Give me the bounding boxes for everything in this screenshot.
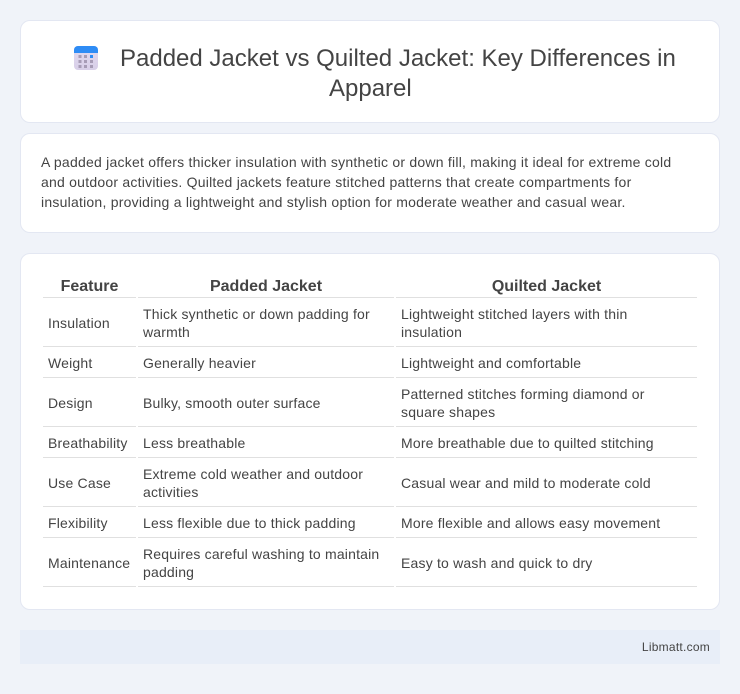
table: feature comparison: Patterned stitches forming diamond or xyxy=(401,386,645,402)
table: feature comparison: padding xyxy=(143,564,194,580)
table: feature comparison: Insulation xyxy=(48,315,110,331)
table: feature comparison: warmth xyxy=(143,324,190,340)
table: feature comparison: Extreme cold weather and outdoor xyxy=(143,466,363,482)
title xyxy=(120,45,676,102)
table: feature comparison: Flexibility xyxy=(48,515,108,531)
table: feature comparison: Casual wear and mild to moderate cold xyxy=(401,475,651,491)
table: feature comparison: Use Case xyxy=(48,475,111,491)
table: feature comparison: Lightweight and comfortable xyxy=(401,355,581,371)
table: feature comparison: Feature xyxy=(61,278,118,295)
table: feature comparison: Design xyxy=(48,395,93,411)
table: feature comparison: Less breathable xyxy=(143,435,245,451)
text block: introduction: and outdoor activities. Quilted jackets feature stitched patterns that create compartments for xyxy=(41,174,631,190)
text block: introduction: A padded jacket offers thicker insulation with synthetic or down fill, making it ideal for extreme cold xyxy=(41,154,671,170)
table: feature comparison: Less flexible due to thick padding xyxy=(143,515,356,531)
table: feature comparison: Thick synthetic or down padding for xyxy=(143,306,370,322)
table: feature comparison: More breathable due to quilted stitching xyxy=(401,435,654,451)
table: feature comparison: square shapes xyxy=(401,404,495,420)
table: feature comparison: Quilted Jacket xyxy=(492,278,601,295)
table: feature comparison: Padded Jacket xyxy=(210,278,322,295)
panel: header: Padded Jacket vs Quilted Jacket: Key Differences in xyxy=(120,45,676,72)
icon: calendar xyxy=(74,46,98,70)
table: feature comparison: activities xyxy=(143,484,199,500)
panel: header: Apparel xyxy=(329,75,412,102)
text block: introduction xyxy=(41,154,671,210)
table: feature comparison: insulation xyxy=(401,324,462,340)
table: feature comparison: Bulky, smooth outer surface xyxy=(143,395,321,411)
panel: header xyxy=(20,20,720,123)
footer: source xyxy=(20,630,720,664)
panel: introduction xyxy=(20,133,720,233)
table: feature comparison: More flexible and allows easy movement xyxy=(401,515,660,531)
table: feature comparison: Lightweight stitched layers with thin xyxy=(401,306,627,322)
text block: introduction: insulation, providing a lightweight and stylish option for moderate weather and casual wear. xyxy=(41,194,626,210)
table: feature comparison: Weight xyxy=(48,355,92,371)
table: feature comparison: Generally heavier xyxy=(143,355,256,371)
table: feature comparison: Maintenance xyxy=(48,555,130,571)
table: feature comparison: Requires careful washing to maintain xyxy=(143,546,379,562)
table: feature comparison: Easy to wash and quick to dry xyxy=(401,555,592,571)
table: feature comparison xyxy=(43,278,697,587)
footer: source: Libmatt.com xyxy=(642,640,710,654)
table: feature comparison: Breathability xyxy=(48,435,128,451)
panel: comparison table xyxy=(20,253,720,610)
